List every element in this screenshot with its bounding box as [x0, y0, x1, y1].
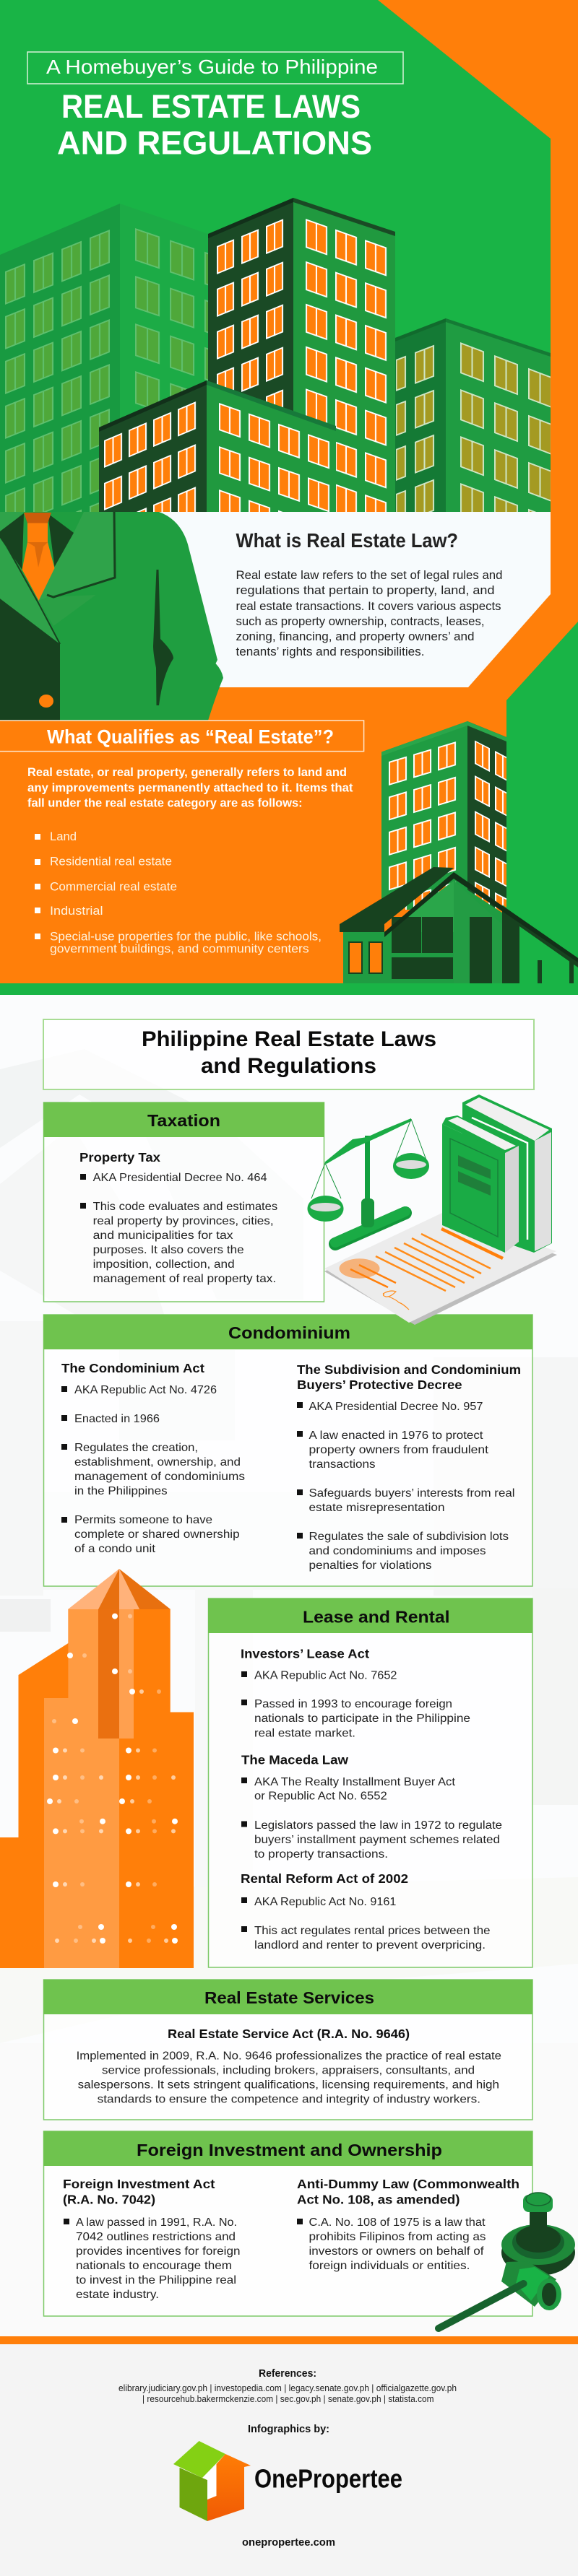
background: faded house photo — [0, 995, 578, 2336]
column: foreign investment act: nationals to encourage them — [76, 2260, 232, 2272]
heading: lease and rental: Lease and Rental — [303, 1607, 449, 1626]
column: the condominium act: of a condo unit — [74, 1543, 156, 1555]
column: anti-dummy law: prohibits Filipinos from acting as — [309, 2231, 486, 2243]
list: real estate categories: Commercial real estate — [50, 881, 177, 894]
illustration: green suit with orange tie — [0, 512, 223, 721]
illustration: scales, books and contract — [308, 1095, 557, 1325]
column: foreign investment act: provides incentives for foreign — [76, 2245, 240, 2258]
text block: real property definition: fall under the real estate category are as follows: — [27, 796, 303, 809]
illustration: front building — [99, 380, 336, 512]
block: investors' lease act: real estate market. — [254, 1728, 355, 1740]
list: real estate categories: Residential real estate — [50, 856, 172, 869]
column: buyers' protective decree: transactions — [309, 1458, 376, 1471]
illustration: small tower and house — [340, 721, 578, 983]
icon: gavel and sound block — [439, 2193, 575, 2328]
title box: A Homebuyer’s Guide to Philippine — [46, 56, 378, 78]
block: investors' lease act — [241, 1646, 470, 1740]
subheading: real estate service act: Real Estate Service Act (R.A. No. 9646) — [168, 2027, 410, 2041]
list: property tax: imposition, collection, and — [93, 1258, 235, 1271]
heading: what is real estate law: What is Real Estate Law? — [236, 529, 458, 552]
column: foreign investment act: (R.A. No. 7042) — [63, 2193, 155, 2207]
infographics by: Infographics by: — [248, 2424, 329, 2435]
column: anti-dummy law: Anti-Dummy Law (Commonwealth — [297, 2177, 519, 2191]
illustration: right green block — [506, 622, 578, 995]
list: real estate categories: Industrial — [50, 905, 103, 918]
block: investors' lease act: Passed in 1993 to encourage foreign — [254, 1698, 452, 1710]
main title: REAL ESTATE LAWS — [61, 88, 361, 125]
icon: house — [340, 867, 578, 983]
column: anti-dummy law: Act No. 108, as amended) — [297, 2193, 460, 2207]
illustration: back right building — [395, 318, 551, 512]
icon: tie — [22, 513, 55, 601]
icon: front book — [442, 1115, 519, 1253]
divider: orange band — [0, 2336, 578, 2344]
block: investors' lease act: Investors’ Lease Act — [241, 1646, 369, 1661]
list: property tax: management of real property tax. — [93, 1273, 276, 1285]
panel: real estate services — [43, 1980, 532, 2120]
heading: foreign investment and ownership: Foreign Investment and Ownership — [137, 2141, 442, 2159]
column: the condominium act: complete or shared ownership — [74, 1528, 240, 1541]
column: anti-dummy law — [297, 2177, 519, 2272]
list: property tax — [80, 1172, 277, 1285]
block: the maceda law: AKA The Realty Installment Buyer Act — [254, 1776, 456, 1788]
text block: service act description: salespersons. It sets stringent qualifications, licensing requirements, and high — [78, 2079, 499, 2092]
list: property tax: real property by provinces, cities, — [93, 1215, 274, 1227]
column: foreign investment act: 7042 outlines restrictions and — [76, 2231, 236, 2243]
title box — [27, 52, 403, 84]
block: the maceda law: The Maceda Law — [241, 1753, 348, 1767]
column: the condominium act: establishment, ownership, and — [74, 1456, 241, 1468]
heading: taxation: Taxation — [147, 1111, 220, 1130]
text block: definition: Real estate law refers to the set of legal rules and — [236, 569, 503, 582]
column: the condominium act: Enacted in 1966 — [74, 1413, 160, 1425]
text block: service act description — [77, 2050, 501, 2106]
block: the maceda law — [241, 1753, 502, 1861]
icon: contract paper — [324, 1213, 557, 1325]
hero section — [0, 0, 551, 512]
column: buyers' protective decree: Regulates the sale of subdivision lots — [309, 1531, 509, 1543]
list: property tax: purposes. It also covers the — [93, 1244, 244, 1256]
panel: lease and rental — [208, 1598, 532, 1967]
column: buyers' protective decree: AKA Presidential Decree No. 957 — [309, 1401, 483, 1413]
block: rental reform act: landlord and renter to prevent overpricing. — [254, 1939, 486, 1951]
subheading: property tax: Property Tax — [79, 1150, 160, 1165]
column: the condominium act — [61, 1361, 245, 1555]
column: foreign investment act: to invest in the Philippine real — [76, 2274, 236, 2286]
column: buyers' protective decree: estate misrepresentation — [309, 1502, 445, 1514]
block: rental reform act: AKA Republic Act No. 9161 — [254, 1896, 396, 1908]
column: anti-dummy law: foreign individuals or entities. — [309, 2260, 470, 2272]
text block: definition — [236, 569, 503, 658]
column: foreign investment act: Foreign Investment Act — [63, 2177, 215, 2191]
heading: real estate services: Real Estate Services — [204, 1988, 374, 2007]
column: anti-dummy law: investors or owners on behalf of — [309, 2245, 484, 2258]
column: buyers' protective decree: A law enacted in 1976 to protect — [309, 1430, 483, 1442]
text block: real property definition — [27, 766, 353, 809]
panel: condominium — [43, 1315, 532, 1586]
column: foreign investment act: estate industry. — [76, 2289, 159, 2301]
heading: what qualifies as real estate: What Qualifies as “Real Estate”? — [47, 726, 334, 748]
list: property tax: AKA Presidential Decree No. 464 — [93, 1172, 267, 1184]
illustration: back left building — [0, 204, 208, 512]
text block: real property definition: any improvements permanently attached to it. Items that — [27, 781, 353, 794]
column: the condominium act: The Condominium Act — [61, 1361, 204, 1375]
footer — [0, 2344, 578, 2576]
text block: real property definition: Real estate, or real property, generally refers to land and — [27, 766, 347, 779]
heading: philippine real estate laws: and Regulations — [201, 1054, 376, 1078]
column: the condominium act: management of condominiums — [74, 1471, 245, 1483]
block: rental reform act — [241, 1871, 491, 1951]
text block: service act description: Implemented in 2009, R.A. No. 9646 professionalizes the practice of real estate — [77, 2050, 501, 2063]
list: property tax: and municipalities for tax — [93, 1230, 233, 1242]
illustration: orange tower — [0, 1569, 194, 1968]
block: rental reform act: Rental Reform Act of 2002 — [241, 1871, 408, 1886]
column: the condominium act: Permits someone to have — [74, 1514, 212, 1526]
block: the maceda law: buyers’ installment payment schemes related — [254, 1834, 500, 1846]
text block: service act description: service professionals, including brokers, appraisers, consultants, and — [102, 2065, 475, 2077]
block: investors' lease act: nationals to participate in the Philippine — [254, 1713, 470, 1725]
icon: back book — [462, 1095, 552, 1253]
column: anti-dummy law: C.A. No. 108 of 1975 is a law that — [309, 2216, 486, 2229]
block: investors' lease act: AKA Republic Act No. 7652 — [254, 1670, 397, 1682]
text block: definition: tenants’ rights and responsibilities. — [236, 645, 425, 658]
column: buyers' protective decree: penalties for violations — [309, 1559, 432, 1572]
column: buyers' protective decree: Buyers’ Protective Decree — [297, 1378, 462, 1392]
main title — [57, 88, 372, 162]
column: the condominium act: AKA Republic Act No. 4726 — [74, 1384, 217, 1396]
list: property tax: This code evaluates and estimates — [93, 1201, 277, 1213]
text block: definition: such as property ownership, contracts, leases, — [236, 615, 484, 628]
icon: balance scale — [308, 1118, 429, 1244]
website: onepropertee.com — [242, 2536, 335, 2549]
column: the condominium act: Regulates the creation, — [74, 1442, 198, 1454]
list: real estate categories: government buildings, and community centers — [50, 943, 309, 956]
logo: onepropertee: OnePropertee — [254, 2464, 402, 2494]
column: buyers' protective decree: property owners from fraudulent — [309, 1444, 489, 1456]
heading: what qualifies as real estate — [0, 721, 364, 752]
panel: foreign investment and ownership — [43, 2131, 532, 2316]
main title: AND REGULATIONS — [57, 124, 372, 162]
references: References: — [259, 2368, 316, 2380]
panel: taxation — [43, 1102, 324, 1302]
panel: what is real estate law — [144, 512, 551, 687]
text block: service act description: standards to ensure the competence and integrity of industry workers. — [98, 2094, 480, 2106]
text block: definition: zoning, financing, and property owners’ and — [236, 630, 474, 643]
heading: philippine real estate laws: Philippine Real Estate Laws — [142, 1027, 436, 1051]
heading: philippine real estate laws — [43, 1019, 534, 1089]
references: elibrary.judiciary.gov.ph | investopedia.com | legacy.senate.gov.ph | officialgazette.gov.ph — [118, 2383, 457, 2393]
block: the maceda law: Legislators passed the law in 1972 to regulate — [254, 1819, 502, 1832]
list: real estate categories — [35, 830, 322, 956]
logo: onepropertee — [173, 2441, 402, 2521]
column: buyers' protective decree — [297, 1362, 521, 1572]
illustration: main tower — [208, 198, 395, 512]
block: the maceda law: or Republic Act No. 6552 — [254, 1790, 387, 1803]
block: rental reform act: This act regulates rental prices between the — [254, 1925, 491, 1937]
list: real estate categories: Special-use properties for the public, like schools, — [50, 931, 322, 944]
column: buyers' protective decree: Safeguards buyers’ interests from real — [309, 1487, 514, 1500]
heading: condominium: Condominium — [228, 1323, 350, 1342]
list: real estate categories: Land — [50, 830, 77, 843]
column: foreign investment act — [63, 2177, 240, 2301]
column: foreign investment act: A law passed in 1991, R.A. No. — [76, 2216, 237, 2229]
tower window lights — [47, 1614, 178, 1944]
column: buyers' protective decree: and condominiums and imposes — [309, 1545, 486, 1557]
text block: definition: regulations that pertain to property, land, and — [236, 584, 494, 597]
column: buyers' protective decree: The Subdivision and Condominium — [297, 1362, 521, 1377]
references — [118, 2368, 457, 2404]
column: the condominium act: in the Philippines — [74, 1485, 168, 1497]
block: the maceda law: to property transactions. — [254, 1848, 388, 1861]
text block: definition: real estate transactions. It covers various aspects — [236, 600, 501, 613]
references: | resourcehub.bakermckenzie.com | sec.gov.ph | senate.gov.ph | statista.com — [142, 2394, 434, 2404]
